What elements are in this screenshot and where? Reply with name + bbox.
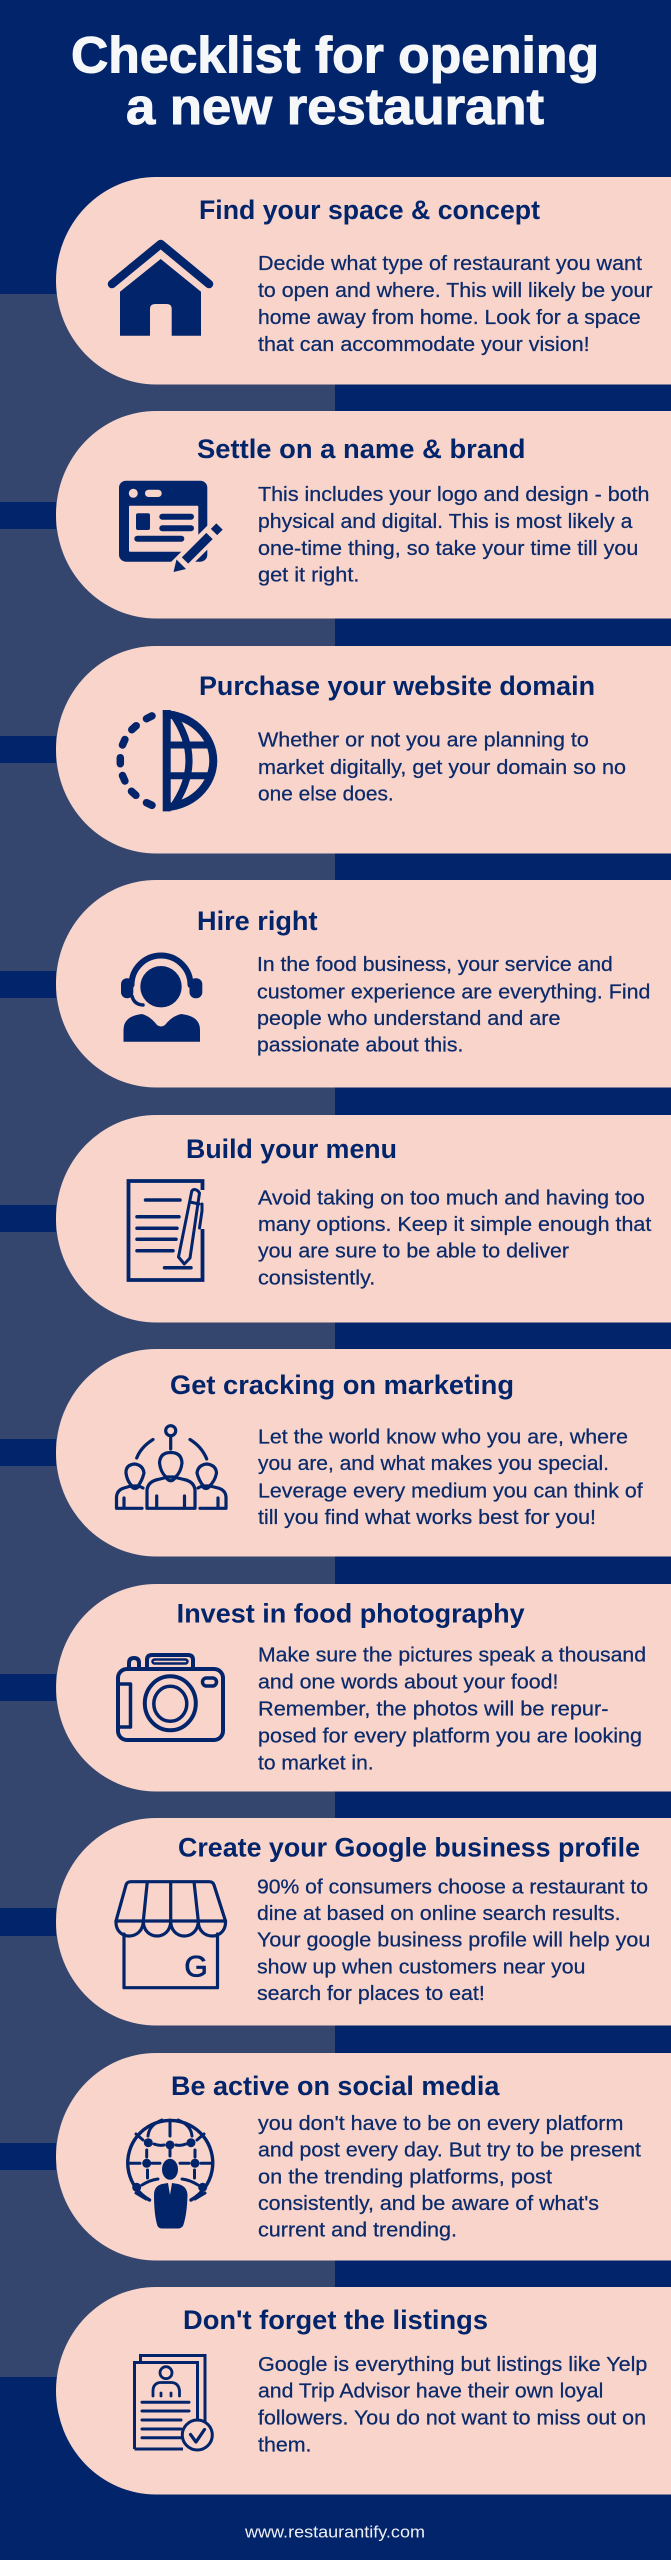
panel: invest in food photography bbox=[56, 1584, 671, 1792]
text block: listings: them. bbox=[258, 2434, 312, 2457]
text block: build your menu: Avoid taking on too much and having too bbox=[258, 1186, 645, 1209]
icon: group of people bbox=[116, 1426, 226, 1508]
text block: name and brand: one-time thing, so take your time till you bbox=[258, 537, 638, 560]
text block: find your space: to open and where. This will likely be your bbox=[258, 279, 653, 302]
text block: hire right: customer experience are everything. Find bbox=[257, 980, 650, 1003]
panel: purchase your website domain bbox=[56, 646, 671, 854]
text block: website domain: Whether or not you are planning to bbox=[258, 729, 589, 752]
icon: storefront with G bbox=[116, 1882, 226, 1988]
heading: hire right: Hire right bbox=[197, 906, 318, 936]
text block: social media bbox=[258, 2112, 641, 2242]
text block: build your menu: consistently. bbox=[258, 1266, 375, 1289]
text block: name and brand: This includes your logo and design - both bbox=[258, 483, 650, 506]
text block: google business profile: dine at based on online search results. bbox=[257, 1902, 620, 1925]
panel: get cracking on marketing bbox=[56, 1349, 671, 1556]
panel: don't forget the listings bbox=[56, 2287, 671, 2494]
text block: hire right: In the food business, your service and bbox=[257, 953, 613, 976]
heading: social media: Be active on social media bbox=[171, 2071, 500, 2101]
text block: find your space: that can accommodate your vision! bbox=[258, 333, 590, 356]
text block: marketing: you are, and what makes you special. bbox=[258, 1452, 609, 1475]
text block: find your space: home away from home. Look for a space bbox=[258, 306, 641, 329]
text block: build your menu: many options. Keep it simple enough that bbox=[258, 1213, 652, 1236]
icon: menu document with pen bbox=[128, 1181, 202, 1280]
text block: social media: you don't have to be on every platform bbox=[258, 2112, 623, 2135]
icon: globe with person bbox=[128, 2120, 213, 2228]
text block: food photography: posed for every platform you are looking bbox=[258, 1724, 642, 1747]
text block: google business profile: Your google business profile will help you bbox=[257, 1929, 650, 1952]
text block: build your menu bbox=[258, 1186, 652, 1289]
text block: hire right: people who understand and are bbox=[257, 1007, 560, 1030]
text block: listings bbox=[258, 2353, 647, 2457]
text block: marketing bbox=[258, 1425, 643, 1529]
text block: find your space bbox=[258, 252, 653, 356]
heading: website domain: Purchase your website domain bbox=[199, 671, 595, 701]
text block: marketing: Leverage every medium you can think of bbox=[258, 1479, 643, 1502]
text block: build your menu: you are sure to be able to deliver bbox=[258, 1240, 569, 1263]
text block: google business profile: 90% of consumers choose a restaurant to bbox=[257, 1875, 648, 1898]
text block: food photography bbox=[258, 1644, 646, 1774]
title bbox=[71, 27, 599, 135]
panel: create your google business profile bbox=[56, 1818, 671, 2026]
heading: name and brand: Settle on a name & brand bbox=[197, 434, 526, 464]
text block: hire right bbox=[257, 953, 650, 1057]
text block: food photography: to market in. bbox=[258, 1751, 374, 1774]
heading: find your space: Find your space & concept bbox=[199, 195, 540, 225]
panel: find your space and concept bbox=[56, 177, 671, 384]
text block: listings: Google is everything but listings like Yelp bbox=[258, 2353, 647, 2376]
heading: listings: Don't forget the listings bbox=[183, 2305, 488, 2335]
text block: food photography: Remember, the photos will be repur- bbox=[258, 1698, 608, 1721]
text block: hire right: passionate about this. bbox=[257, 1034, 463, 1057]
text block: food photography: and one words about your food! bbox=[258, 1670, 558, 1693]
icon: headset person bbox=[121, 956, 202, 1042]
icon: profile document with check bbox=[134, 2356, 212, 2450]
panel: settle on a name and brand bbox=[56, 411, 671, 618]
text block: social media: and post every day. But try to be present bbox=[258, 2139, 641, 2162]
text block: food photography: Make sure the pictures speak a thousand bbox=[258, 1644, 646, 1667]
title: Checklist for opening bbox=[71, 27, 599, 84]
icon: camera bbox=[118, 1655, 223, 1740]
heading: marketing: Get cracking on marketing bbox=[170, 1370, 514, 1400]
heading: food photography: Invest in food photography bbox=[177, 1598, 525, 1628]
text block: website domain bbox=[258, 729, 626, 806]
text block: google business profile bbox=[257, 1875, 650, 2005]
heading: build your menu: Build your menu bbox=[186, 1134, 397, 1164]
text block: marketing: Let the world know who you are, where bbox=[258, 1425, 628, 1448]
panel: hire right bbox=[56, 880, 671, 1088]
text block: name and brand: get it right. bbox=[258, 564, 359, 587]
text block: website domain: market digitally, get your domain so no bbox=[258, 756, 626, 779]
text block: marketing: till you find what works best for you! bbox=[258, 1506, 596, 1529]
text block: website domain: one else does. bbox=[258, 783, 394, 806]
title: a new restaurant bbox=[126, 78, 544, 135]
text block: listings: followers. You do not want to miss out on bbox=[258, 2406, 646, 2429]
text block: social media: current and trending. bbox=[258, 2219, 457, 2242]
icon: house bbox=[112, 244, 209, 336]
panel: build your menu bbox=[56, 1115, 671, 1322]
text block: google business profile: show up when customers near you bbox=[257, 1955, 585, 1978]
text block: social media: consistently, and be aware of what's bbox=[258, 2192, 599, 2215]
text block: find your space: Decide what type of restaurant you want bbox=[258, 252, 642, 275]
icon: half globe with dashed outline bbox=[120, 710, 213, 811]
text block: google business profile: search for places to eat! bbox=[257, 1982, 485, 2005]
text block: social media: on the trending platforms, post bbox=[258, 2165, 552, 2188]
footer url: www.restaurantify.com bbox=[244, 2524, 425, 2542]
heading: google business profile: Create your Google business profile bbox=[178, 1833, 640, 1863]
text block: name and brand bbox=[258, 483, 650, 587]
icon: storefront with G: G bbox=[184, 1950, 208, 1984]
panel: be active on social media bbox=[56, 2053, 671, 2260]
text block: name and brand: physical and digital. This is most likely a bbox=[258, 510, 633, 533]
text block: listings: and Trip Advisor have their own loyal bbox=[258, 2380, 603, 2403]
icon: browser window with pencil bbox=[119, 481, 224, 577]
